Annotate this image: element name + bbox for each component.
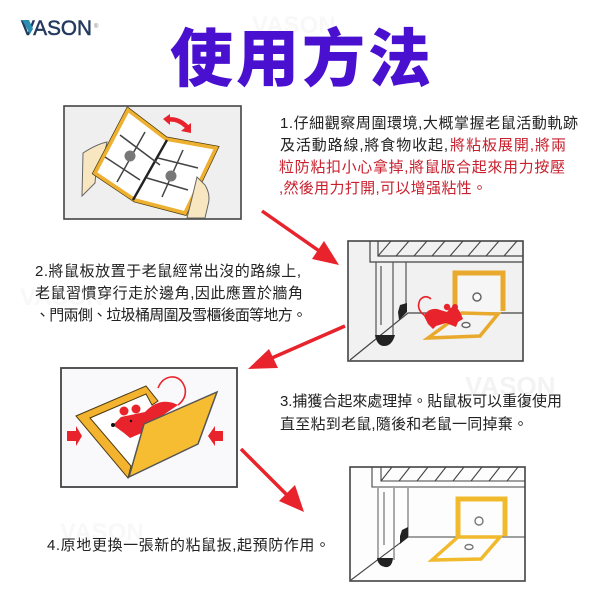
text: step 1: 粒防粘扣小心拿掉,將鼠版合起來用力按壓 <box>279 158 565 176</box>
title: 使用方法 <box>170 25 431 95</box>
text: step 2: 、門兩側、垃圾桶周圍及雪櫃後面等地方。 <box>35 306 307 324</box>
text: step 1: 及活動路線,將食物收起, <box>280 137 448 154</box>
text: step 4: 4.原地更換一張新的粘鼠扳,起預防作用。 <box>47 537 330 554</box>
icon: hand right <box>187 177 209 218</box>
watermark: VASON <box>252 12 336 39</box>
text: step 3 <box>280 393 562 433</box>
icon: red mouse caught <box>111 377 185 438</box>
text: step 2: 老鼠習慣穿行走於邊角,因此應置於牆角 <box>35 284 303 302</box>
icon: board back <box>76 386 158 478</box>
logo: VASON: ® <box>94 23 99 30</box>
text: step 1: 將粘板展開,將兩 <box>450 137 566 154</box>
text: step 3: 3.捕獲合起來處理掉。貼鼠板可以重復使用 <box>280 393 562 410</box>
icon: press arrows <box>67 426 223 446</box>
watermark: VASON <box>465 371 556 401</box>
text: step 1 <box>279 114 578 197</box>
icon: board front <box>129 392 217 477</box>
arrow: step 2 to 3 <box>248 326 345 369</box>
panel: step 2 illustration <box>348 241 523 361</box>
text: step 2 <box>35 263 307 324</box>
panel: step 4 illustration <box>350 467 525 581</box>
icon: glue board open <box>95 110 216 213</box>
logo: VASON: VASON <box>21 17 92 40</box>
icon: red mouse <box>419 297 463 329</box>
text: step 1: ,然後用力打開,可以增强粘性。 <box>279 180 487 197</box>
panel: step 1 illustration <box>64 106 241 219</box>
icon: glue board <box>432 499 505 560</box>
watermark <box>20 12 556 546</box>
panel: step 3 illustration <box>61 368 237 487</box>
icon: glue board <box>428 273 503 338</box>
icon: hand left <box>82 142 107 196</box>
text: step 1: 1.仔細觀察周圍環境,大概掌握老鼠活動軌跡 <box>280 114 578 132</box>
text: step 3: 直至粘到老鼠,隨後和老鼠一同掉棄。 <box>280 415 528 433</box>
watermark: VASON <box>20 284 104 311</box>
text: step 2: 2.將鼠板放置于老鼠經常出沒的路線上, <box>35 263 301 280</box>
arrow: step 3 to 4 <box>241 449 304 512</box>
icon: curved red arrow <box>163 114 191 133</box>
watermark: VASON <box>60 519 144 546</box>
arrow: step 1 to 2 <box>262 211 339 265</box>
